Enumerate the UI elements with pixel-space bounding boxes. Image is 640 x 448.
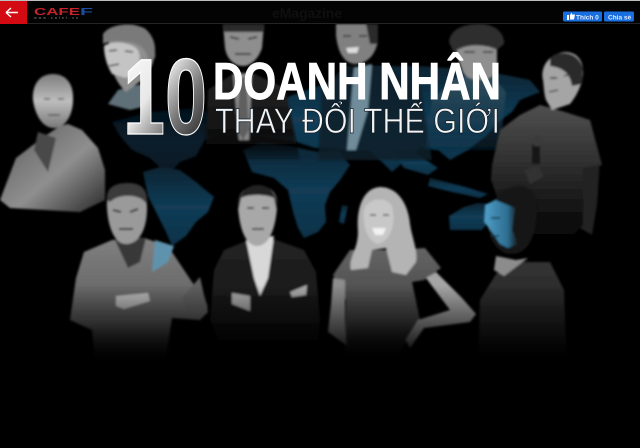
person: Jeff Bezos <box>0 74 105 212</box>
share button: Chia sẻ <box>608 14 632 21</box>
person: Sara Blakely <box>328 187 476 360</box>
bottom fade <box>0 285 640 360</box>
person: Reed Hastings <box>70 183 208 370</box>
section title: eMagazine <box>272 5 342 21</box>
top bar <box>0 0 640 24</box>
person: Jack Ma <box>478 186 567 372</box>
person: Terry Gou <box>205 24 300 160</box>
title line 1: DOANH NHÂN <box>213 52 501 111</box>
headline <box>123 36 501 157</box>
person: Marc Benioff <box>318 24 432 160</box>
map: southeast islands <box>428 178 488 198</box>
logo: F <box>80 6 94 18</box>
logo: CAFE <box>34 6 80 18</box>
like button <box>563 12 602 22</box>
map: north america <box>112 108 232 175</box>
map: europe and asia <box>250 66 540 172</box>
person: Mark Zuckerberg <box>491 52 602 250</box>
map: madagascar <box>339 205 348 224</box>
like button: Thích 0 <box>576 14 599 21</box>
map: south america <box>143 167 214 246</box>
map: australia <box>449 203 490 230</box>
title line 2: THAY ĐỔI THẾ GIỚI <box>215 101 500 141</box>
map: east asia patch <box>392 150 438 175</box>
share button <box>604 12 634 22</box>
logo <box>34 6 94 20</box>
person: Elon Musk <box>210 185 320 350</box>
world map <box>112 66 540 246</box>
person: Larry Page <box>103 24 155 110</box>
logo: www.cafef.vn <box>34 16 78 20</box>
person: Travis Kalanick <box>425 24 506 150</box>
numeral 10: 10 <box>123 36 207 157</box>
back button <box>0 1 27 24</box>
map: africa <box>243 142 350 238</box>
